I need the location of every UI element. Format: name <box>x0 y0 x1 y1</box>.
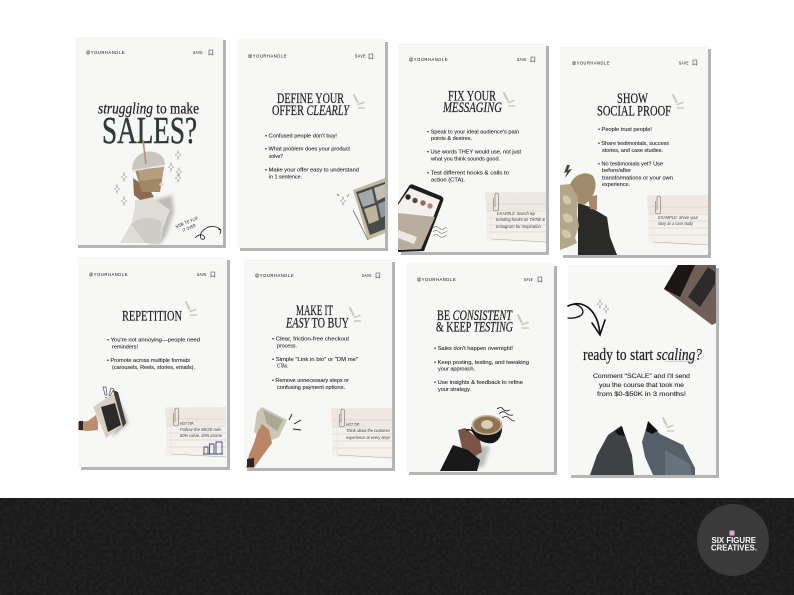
image: feet in jeans <box>590 421 695 475</box>
panel: card 5 repetition <box>78 257 230 470</box>
note: example <box>647 195 708 245</box>
icon: lightning <box>564 165 572 178</box>
bullet list: before/after <box>602 168 631 174</box>
bullet list <box>434 346 529 393</box>
heading <box>272 91 350 119</box>
chart icon: bars <box>203 442 223 454</box>
icon: squiggle <box>497 408 515 421</box>
image: laptop <box>664 265 716 325</box>
bullet list: confusing payment options. <box>277 385 345 391</box>
bullet list: • No testimonials yet? Use <box>598 162 663 168</box>
heading <box>597 91 671 120</box>
logo: six figure creatives: CREATIVES. <box>711 544 757 552</box>
handle: @YOURHANDLE <box>89 272 128 277</box>
bullet list: stories, and case studies. <box>602 148 663 154</box>
image: phone <box>398 184 443 252</box>
heading: REPETITION <box>122 308 182 324</box>
bullet list: • Sales don't happen overnight! <box>434 346 513 352</box>
icon: accent <box>673 95 684 108</box>
image: hand with cash <box>246 407 287 468</box>
save bookmark: SAVE <box>517 57 527 62</box>
bullet list: • Use words THEY would use, not just <box>427 150 521 156</box>
arrow: squiggle <box>195 226 221 239</box>
icon: sparkles <box>337 194 349 206</box>
bullet list: • Promote across multiple formats <box>107 358 190 364</box>
bullet list: • Remove unnecessary steps or <box>272 378 349 384</box>
heading: ready to start scaling? <box>583 345 702 364</box>
bullet list: your strategy. <box>438 387 471 393</box>
bullet list: • Use insights & feedback to refine <box>434 380 523 386</box>
note: hot tip: HOT TIP: <box>180 421 195 426</box>
bullet list <box>427 130 521 184</box>
handle: @YOURHANDLE <box>255 273 294 278</box>
heading: MAKE IT <box>296 303 333 319</box>
icon: accent <box>504 93 514 106</box>
logo: six figure creatives: SIX FIGURE <box>712 536 756 545</box>
bullet list: process. <box>277 344 297 350</box>
image: tablet and pencil <box>353 178 385 240</box>
note: hot tip: HOT TIP: <box>346 422 361 427</box>
icon: burst lines <box>289 414 301 430</box>
save bookmark: SAVE <box>197 272 207 277</box>
icon: waves <box>433 226 447 237</box>
panel: card 1 struggling to make sales <box>75 37 226 248</box>
bullet list: • Speak to your ideal audience's pain <box>427 130 519 136</box>
icon: accent <box>354 95 364 108</box>
bullet list: experience. <box>602 182 630 188</box>
call to action text: you the course that took me <box>599 383 685 389</box>
footer band <box>0 498 794 595</box>
panel: card 2 define your offer <box>237 39 388 251</box>
bullet list: • You're not annoying—people need <box>107 338 200 344</box>
image: woman with ponytail <box>560 173 617 255</box>
heading: BE CONSISTENT <box>437 308 513 324</box>
save bookmark: SAVE <box>355 54 366 58</box>
bullet list: your approach. <box>438 366 475 372</box>
handle: @YOURHANDLE <box>248 54 287 58</box>
heading: EASY TO BUY <box>285 316 349 332</box>
note: example: EXAMPLE: Search top <box>497 211 535 216</box>
save bookmark: SAVE <box>679 60 689 66</box>
icon: accent <box>663 418 674 431</box>
save bookmark: SAVE <box>524 277 533 282</box>
panel: card 3 fix your messaging <box>398 43 549 255</box>
bullet list: • Make your offer easy to understand <box>265 168 359 174</box>
flip label: IT OVER <box>182 223 197 233</box>
heading: struggling to make <box>98 100 199 118</box>
panel: card 8 ready to start scaling <box>568 265 719 478</box>
bullet list: • Clear, friction-free checkout <box>272 336 349 342</box>
note: example: Instagram for inspiration. <box>496 224 542 229</box>
call to action text <box>593 374 690 398</box>
note: example: story as a case study <box>658 221 694 226</box>
bullet list <box>265 134 359 180</box>
heading: & KEEP TESTING <box>436 320 513 336</box>
bullet list: • People trust people! <box>598 127 652 133</box>
heading: DEFINE YOUR <box>277 91 344 107</box>
note: example <box>485 192 546 242</box>
note: example: EXAMPLE: Share your <box>658 215 698 220</box>
handle: @YOURHANDLE <box>86 50 125 55</box>
panel: card 4 show social proof <box>560 46 711 258</box>
bullet list: reminders! <box>112 344 138 350</box>
heading <box>285 303 349 332</box>
panel: card 6 make it easy to buy <box>244 259 395 471</box>
bullet list: • Share testimonials, success <box>598 141 669 147</box>
bullet list: • Confused people don't buy! <box>265 134 337 140</box>
handle: @YOURHANDLE <box>409 57 448 62</box>
heading: OFFER CLEARLY <box>272 103 350 119</box>
heading <box>442 88 502 116</box>
highlight scribble <box>665 352 703 362</box>
icon: accent <box>350 308 360 321</box>
call to action text: from $0-$50K in 3 months! <box>597 392 686 398</box>
bullet list <box>107 338 200 371</box>
note: hot tip <box>331 408 392 458</box>
bullet list: • Simple "Link in bio" or "DM me" <box>272 357 358 363</box>
image: hand holding iced coffee <box>120 140 174 244</box>
flip label <box>175 215 201 235</box>
bullet list <box>598 127 673 188</box>
bullet list: action (CTA). <box>431 178 465 184</box>
note: hot tip: experience at every step! <box>346 435 391 440</box>
save bookmark: SAVE <box>193 50 203 55</box>
heading: SHOW <box>617 91 649 107</box>
note: example: trending hooks on TikTok & <box>496 217 545 222</box>
heading: FIX YOUR <box>448 88 496 104</box>
icon: accent <box>186 302 196 315</box>
bullet list: • Test different hooks & calls to <box>427 170 509 176</box>
bullet list: transformations or your own <box>602 176 673 182</box>
icon: sparkles <box>597 300 609 314</box>
bullet list <box>272 336 358 391</box>
icon: sparkles <box>114 150 182 206</box>
bullet list: what you think sounds good. <box>430 156 500 162</box>
bullet list: in 1 sentence. <box>269 174 302 180</box>
flip label: HOW TO FLIP <box>175 215 199 229</box>
heading: sales: SALES? <box>102 110 197 152</box>
heading: MESSAGING <box>442 100 502 116</box>
panel: card 7 be consistent and keep testing <box>406 263 557 475</box>
bullet list: points & desires. <box>431 136 472 142</box>
note: hot tip <box>165 407 226 457</box>
image: hand holding coffee cup <box>440 415 502 471</box>
note: hot tip: Follow the 80/20 rule. <box>180 427 222 432</box>
heading: SOCIAL PROOF <box>597 104 671 120</box>
call to action text: Comment "SCALE" and I'll send <box>593 374 690 380</box>
bullet list: solve? <box>269 154 283 160</box>
logo: six figure creatives <box>697 504 769 576</box>
handle: @YOURHANDLE <box>572 60 610 66</box>
arrow: hand drawn <box>568 304 605 335</box>
note: hot tip: 80% value, 20% promo <box>180 433 223 438</box>
bullet list: CTAs. <box>277 364 288 370</box>
bullet list: • What problem does your product <box>265 146 350 152</box>
icon: accent <box>518 315 528 328</box>
heading <box>436 308 513 336</box>
note: hot tip: Think about the customer <box>346 428 390 433</box>
image: laptop and hand <box>78 390 128 438</box>
handle: @YOURHANDLE <box>417 277 456 282</box>
bullet list: • Keep posting, testing, and tweaking <box>434 360 529 366</box>
bullet list: (carousels, Reels, stories, emails). <box>112 365 195 371</box>
icon: exclamation marks <box>103 387 114 398</box>
save bookmark: SAVE <box>362 273 372 278</box>
